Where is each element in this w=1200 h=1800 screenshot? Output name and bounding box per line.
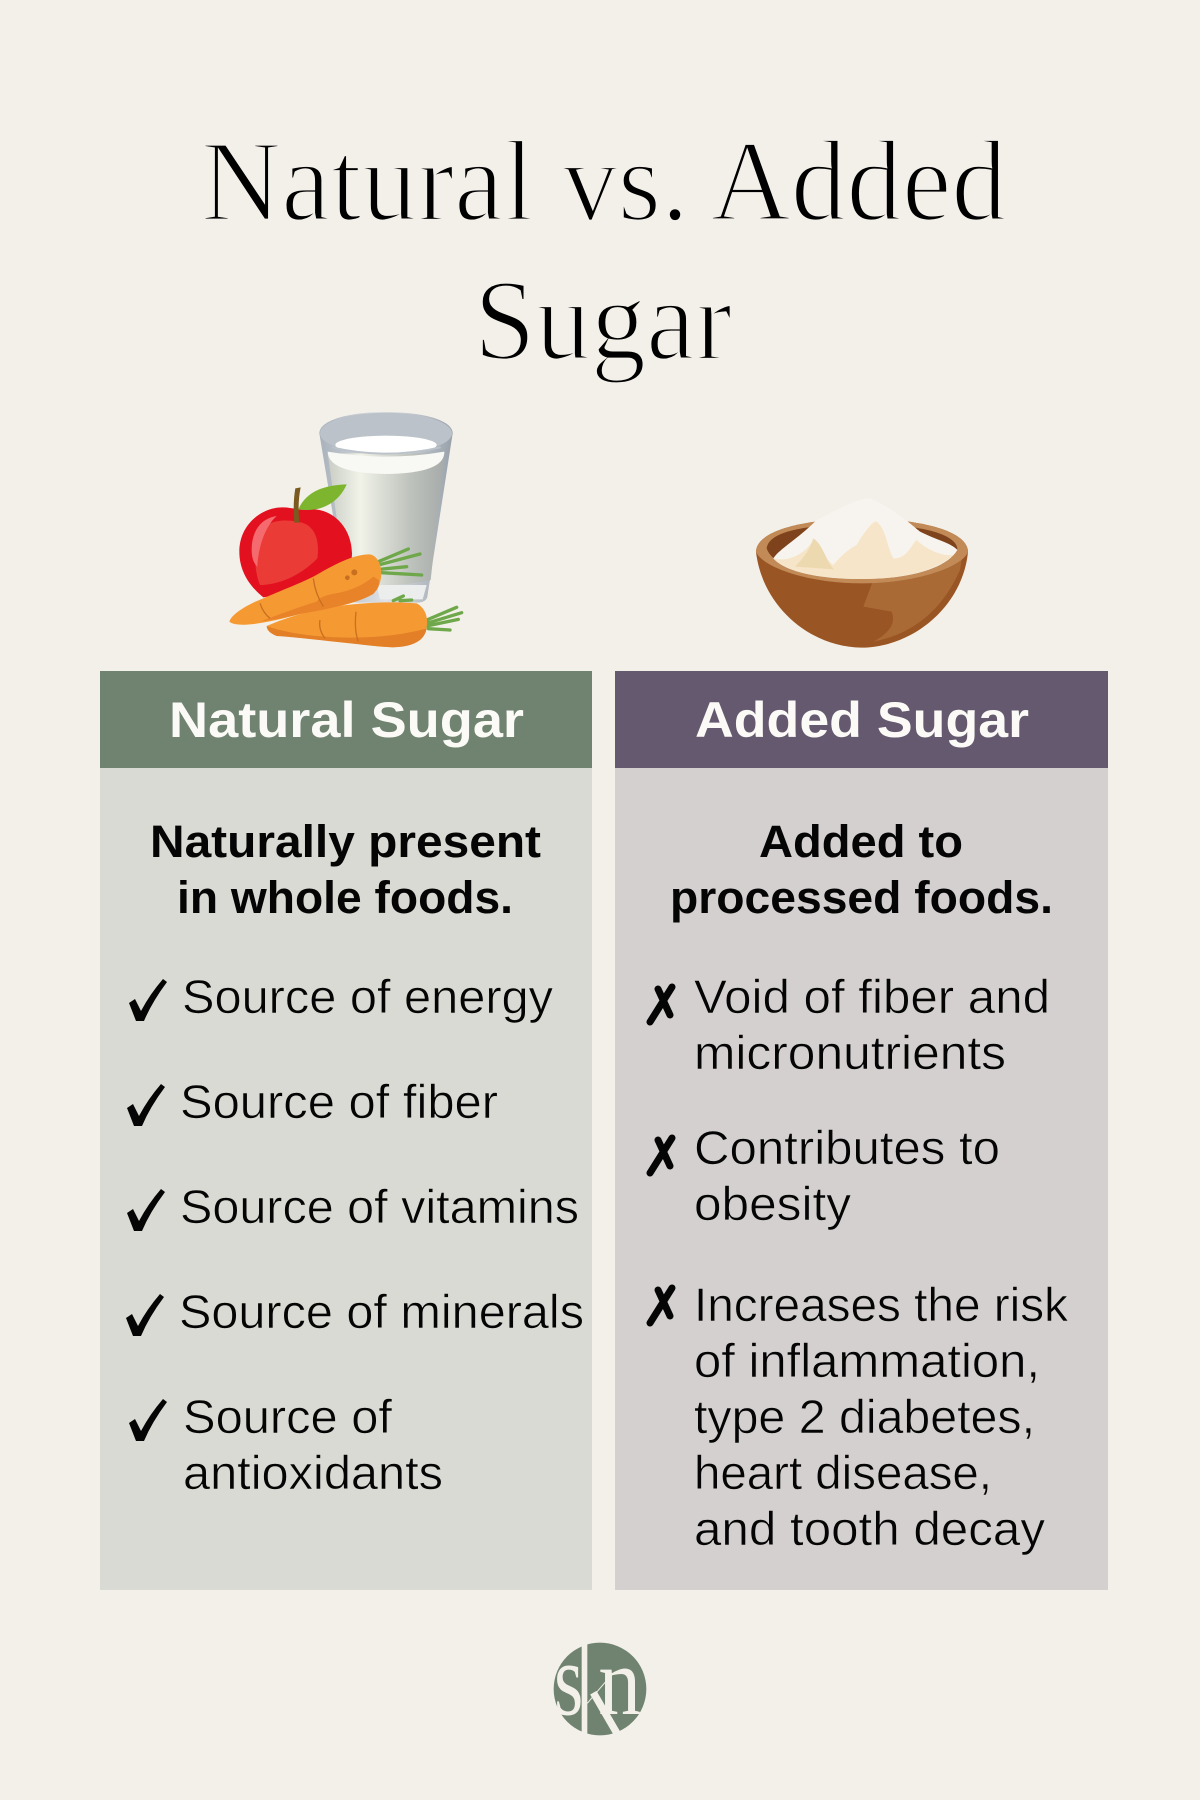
list item: increases the risk: heart disease,: [694, 1446, 992, 1499]
list item: contributes to obesity: obesity: [694, 1177, 852, 1230]
logo: n: [598, 1628, 641, 1735]
header: natural sugar: [100, 671, 592, 768]
subheading: natural sugar: [150, 816, 541, 923]
subheading: added sugar: processed foods.: [670, 872, 1053, 923]
title: Sugar: [474, 257, 732, 385]
icon: milk glass, apple and carrots: [229, 412, 462, 647]
panel body: natural sugar: [100, 768, 592, 1590]
list item: increases the risk: of inflammation,: [694, 1334, 1040, 1387]
icon: bowl of sugar: [756, 522, 968, 648]
list item: contributes to obesity: [650, 1121, 1000, 1230]
subheading: natural sugar: Naturally present: [150, 816, 541, 867]
list item: source of minerals: Source of minerals: [179, 1285, 584, 1338]
list item: void of fiber: micronutrients: [694, 1026, 1006, 1079]
title: Natural vs. Added: [201, 118, 1007, 246]
list item: source of energy: Source of energy: [182, 970, 554, 1023]
logo: s: [554, 1624, 583, 1738]
logo: [554, 1624, 646, 1738]
list item: source of vitamins: Source of vitamins: [180, 1180, 579, 1233]
list item: increases the risk: Increases the risk: [694, 1278, 1069, 1331]
list item: void of fiber: Void of fiber and: [694, 970, 1050, 1023]
panel: natural sugar: [100, 671, 592, 1590]
list item: void of fiber: [650, 970, 1050, 1079]
list item: source of antioxidants: Source of: [183, 1390, 393, 1443]
list item: source of fiber: Source of fiber: [180, 1075, 498, 1128]
list item: source of antioxidants: [129, 1390, 443, 1499]
list item: contributes to obesity: Contributes to: [694, 1121, 1000, 1174]
list item: increases the risk: type 2 diabetes,: [694, 1390, 1035, 1443]
header: natural sugar: Natural Sugar: [169, 692, 524, 748]
title: [201, 118, 1007, 385]
list item: source of antioxidants: antioxidants: [183, 1446, 443, 1499]
subheading: added sugar: [670, 816, 1053, 923]
panel body: added sugar: [615, 768, 1108, 1590]
header: added sugar: Added Sugar: [695, 692, 1029, 748]
header: added sugar: [615, 671, 1108, 768]
list item: increases the risk: [650, 1278, 1069, 1555]
panel: added sugar: [615, 671, 1108, 1590]
subheading: natural sugar: in whole foods.: [177, 872, 513, 923]
list item: increases the risk: and tooth decay: [694, 1502, 1046, 1555]
subheading: added sugar: Added to: [759, 816, 963, 867]
